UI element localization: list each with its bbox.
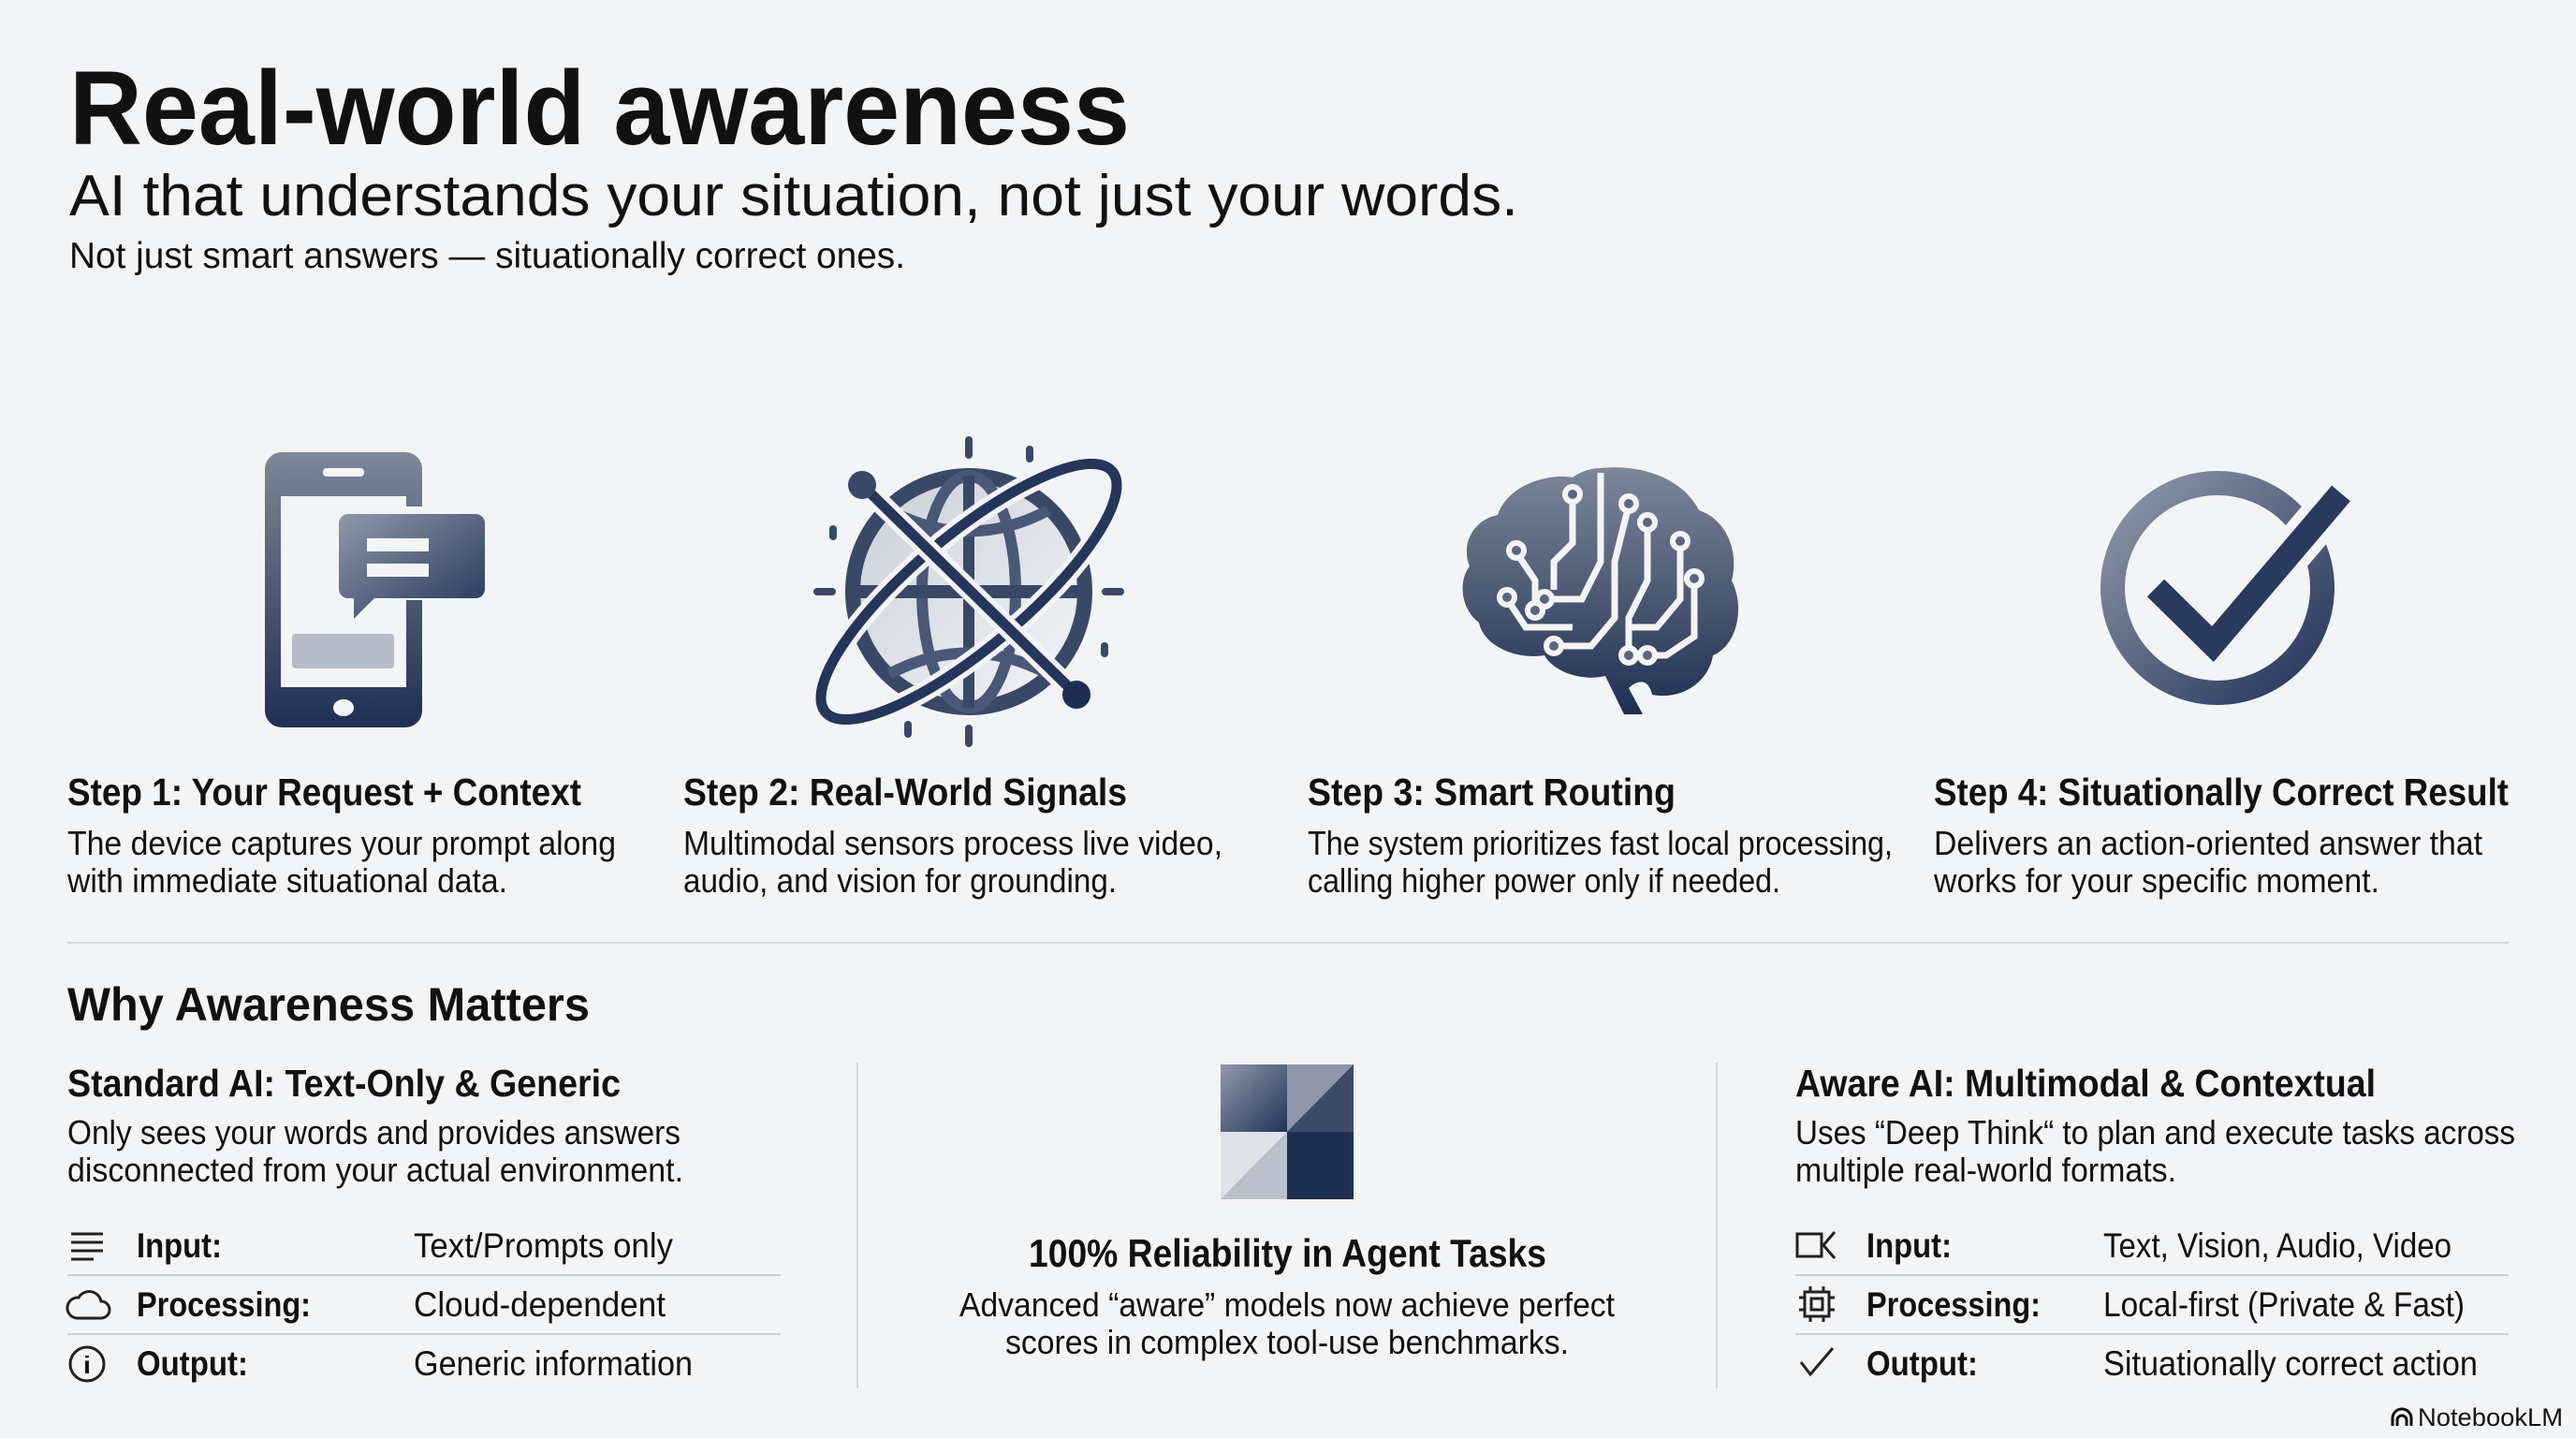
step 3 (1308, 770, 1893, 900)
subtitle: AI that understands your situation, not just your words. (69, 164, 1518, 228)
panel: standard AI: Generic information (414, 1344, 693, 1383)
panel: center stat: 100% Reliability in Agent Tasks (1029, 1231, 1546, 1275)
panel: standard AI: Input: (137, 1226, 222, 1265)
step 4: works for your specific moment. (1933, 861, 2379, 900)
panel: standard AI: Standard AI: Text-Only & Generic (67, 1062, 621, 1105)
step 3: calling higher power only if needed. (1308, 861, 1780, 900)
step 4 (1933, 770, 2509, 900)
panel: aware AI: Input: (1866, 1226, 1952, 1265)
step 4: Delivers an action-oriented answer that (1934, 824, 2482, 862)
step 3: The system prioritizes fast local processing, (1308, 824, 1893, 862)
panel: center stat: scores in complex tool-use benchmarks. (1005, 1323, 1569, 1361)
panel: aware AI: Uses “Deep Think“ to plan and execute tasks across (1795, 1113, 2515, 1152)
icon: globe (789, 428, 1149, 756)
panel: aware AI: Aware AI: Multimodal & Contextual (1795, 1062, 2376, 1105)
logo: NotebookLM: NotebookLM (2418, 1403, 2563, 1431)
step 1: with immediate situational data. (66, 861, 507, 900)
panel: standard AI: Output: (137, 1344, 248, 1383)
panel: aware AI: Processing: (1866, 1285, 2041, 1324)
step 2: Step 2: Real-World Signals (683, 770, 1127, 814)
panel: aware AI: Situationally correct action (2103, 1344, 2478, 1383)
panel: aware AI: Output: (1866, 1344, 1978, 1383)
step 2: Multimodal sensors process live video, (683, 824, 1222, 862)
step 1: The device captures your prompt along (67, 824, 616, 862)
icon: brain (1463, 467, 1738, 714)
panel: aware AI (1795, 1062, 2515, 1383)
icon: check circle (2113, 483, 2341, 693)
step 3: Step 3: Smart Routing (1308, 770, 1676, 814)
panel: standard AI: Processing: (137, 1285, 311, 1324)
icon: phone (265, 452, 494, 727)
panel: center stat (959, 1064, 1615, 1361)
panel: aware AI: Local-first (Private & Fast) (2103, 1285, 2465, 1324)
section heading: Why Awareness Matters (67, 978, 590, 1031)
panel: standard AI (67, 1062, 781, 1383)
panel: aware AI: Text, Vision, Audio, Video (2103, 1226, 2452, 1265)
panel: standard AI: i (82, 1351, 92, 1379)
panel: standard AI: disconnected from your actual environment. (67, 1151, 683, 1189)
tagline: Not just smart answers — situationally correct ones. (69, 236, 905, 276)
step 2 (683, 770, 1222, 900)
panel: standard AI: Cloud-dependent (414, 1285, 666, 1324)
step 1: Step 1: Your Request + Context (67, 770, 581, 814)
panel: aware AI: multiple real-world formats. (1795, 1151, 2176, 1189)
step 1 (66, 770, 616, 900)
title: Real-world awareness (69, 50, 1130, 167)
step 2: audio, and vision for grounding. (683, 861, 1117, 900)
panel: standard AI: Only sees your words and provides answers (67, 1113, 681, 1152)
step 4: Step 4: Situationally Correct Result (1934, 770, 2509, 814)
panel: center stat: Advanced “aware” models now achieve perfect (959, 1285, 1615, 1324)
panel: standard AI: Text/Prompts only (414, 1226, 673, 1265)
